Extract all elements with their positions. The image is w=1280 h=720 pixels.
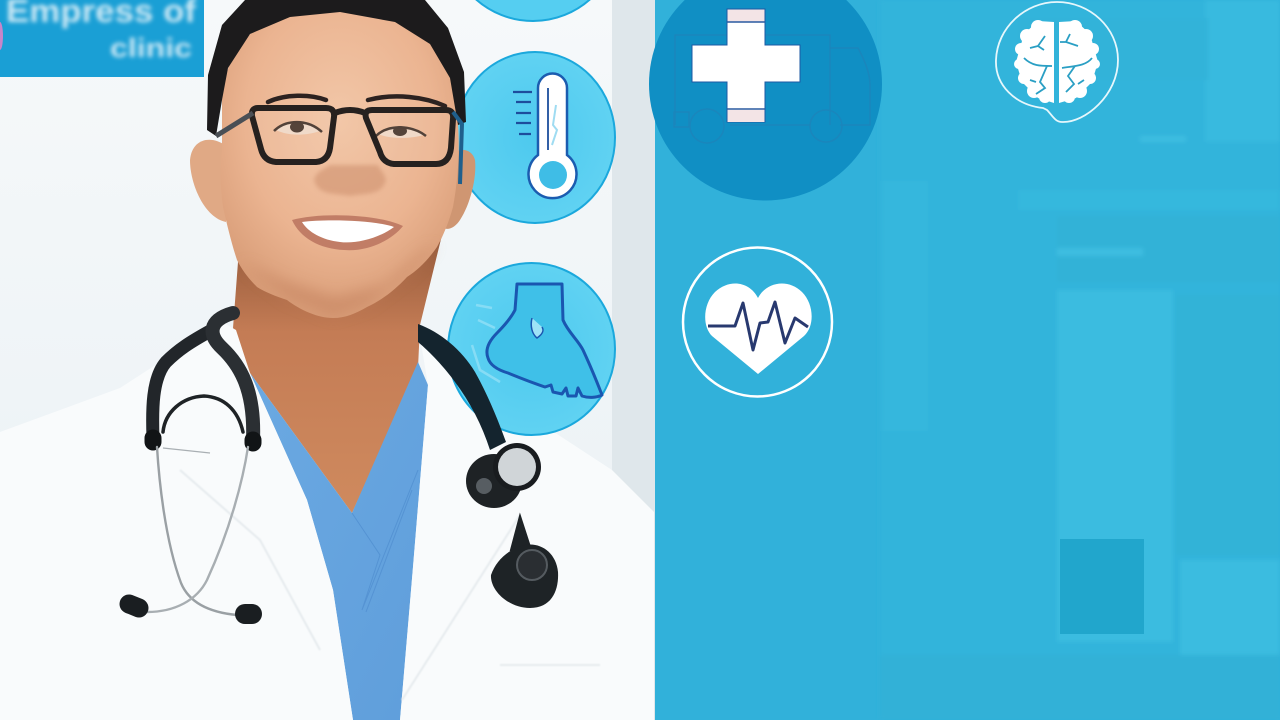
icon: thermometer in disc [455, 52, 615, 223]
glasses [216, 108, 462, 184]
chestpiece lower [491, 516, 558, 608]
tube ends [153, 438, 253, 443]
icon: brain in outlined bubble [996, 2, 1118, 122]
wall background [0, 0, 656, 720]
headset arch [163, 396, 243, 432]
faint ambulance outline [674, 35, 870, 143]
metal wires [157, 447, 237, 615]
nose [314, 165, 386, 196]
blue scrubs [250, 362, 428, 720]
ear tips [129, 604, 139, 608]
cheek and jaw shading [240, 245, 437, 316]
faint clinic room backdrop [880, 0, 1280, 720]
face [221, 10, 459, 318]
blurred clinic wall sign: clinic [110, 33, 192, 63]
right ear [442, 150, 475, 229]
scrubs collar folds [352, 470, 418, 612]
doctor head [190, 0, 475, 318]
blurred clinic wall sign [0, 0, 204, 77]
coat lapel shading [180, 470, 600, 700]
left tubing [153, 330, 212, 438]
icon: heart with pulse line [683, 248, 832, 396]
neck [233, 235, 442, 513]
left ear [190, 140, 226, 222]
chestpiece upper [466, 443, 541, 508]
left lobe [1014, 20, 1054, 103]
right tubing [418, 324, 506, 450]
dark square in backdrop [1060, 539, 1144, 634]
icon: medical cross over ambulance disc [649, 0, 882, 200]
icon disc: partly cropped top circle [447, 0, 619, 21]
white coat right [400, 325, 654, 720]
eyes [274, 122, 426, 138]
blue right panel [655, 0, 1280, 720]
doctor torso: neck, scrubs and white coat [0, 235, 654, 720]
hair [207, 0, 466, 136]
right lobe [1059, 20, 1100, 103]
eyebrows [268, 96, 445, 106]
stethoscope [129, 313, 558, 615]
icon: foot in disc [448, 263, 615, 435]
white coat left [0, 322, 353, 720]
brain folds [1024, 34, 1092, 94]
smile [292, 215, 403, 250]
